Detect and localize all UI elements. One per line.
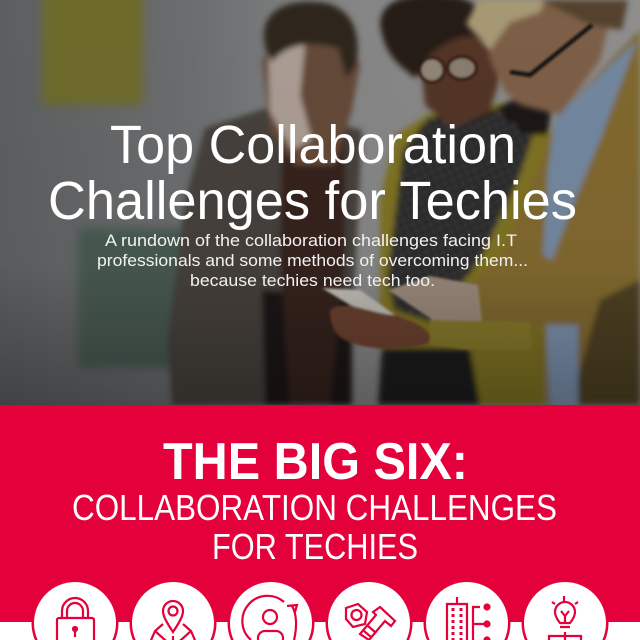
red band heading [72, 433, 557, 567]
icon badges [32, 580, 608, 640]
hero shadow [0, 278, 640, 405]
woman centre [378, 0, 552, 405]
man right [466, 0, 640, 405]
title: Top Collaboration [110, 115, 516, 175]
tablet and hands [322, 276, 532, 350]
badge: map pin [130, 580, 216, 640]
subtitle: A rundown of the collaboration challenges facing I.T [105, 231, 517, 250]
badge: light bulb [522, 580, 608, 640]
red band [0, 405, 640, 622]
red band heading: COLLABORATION CHALLENGES [72, 487, 557, 528]
subtitle [97, 231, 528, 290]
blurred teal note [78, 228, 200, 368]
blurred yellow note [42, 0, 143, 105]
badge: nut and bolt [326, 580, 412, 640]
red band heading: FOR TECHIES [212, 526, 418, 567]
title [48, 115, 577, 231]
man left [168, 2, 362, 405]
subtitle: professionals and some methods of overcoming them... [97, 251, 528, 270]
subtitle: because techies need tech too. [190, 271, 435, 290]
hero photo [0, 0, 640, 405]
glasses [420, 25, 592, 82]
title: Challenges for Techies [48, 171, 577, 231]
badge: user refresh [228, 580, 314, 640]
red band heading: THE BIG SIX: [163, 433, 468, 491]
badge: lock [32, 580, 118, 640]
badge: building [424, 580, 510, 640]
